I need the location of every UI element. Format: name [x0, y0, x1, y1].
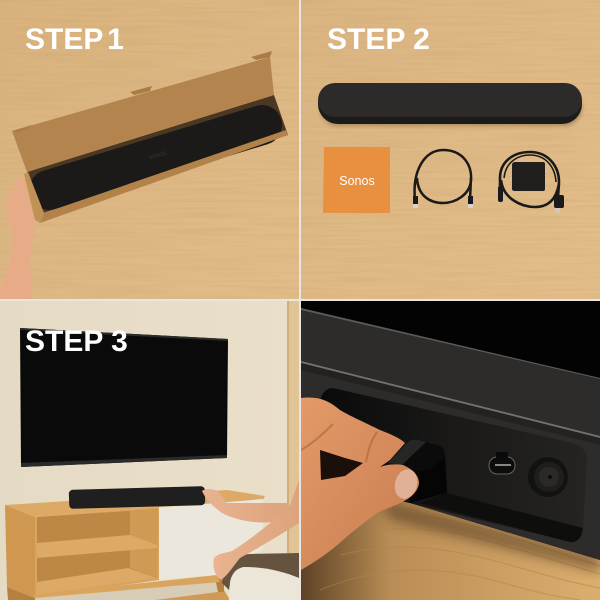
soundbar rear [301, 308, 600, 560]
orange Sonos card: Sonos [339, 174, 375, 188]
soundbar on cabinet [69, 486, 205, 509]
person's arms [202, 480, 299, 580]
armchair [222, 553, 299, 600]
soundbar in box: SONOS [148, 150, 168, 162]
wall-mounted TV [20, 328, 228, 467]
hand inserting plug [301, 398, 421, 570]
heading: step 2: STEP 2 [327, 23, 430, 56]
panel: step 3 placement [0, 301, 300, 600]
heading: step 3: STEP 3 [25, 325, 128, 358]
soundbar front view [318, 83, 582, 126]
panel: step 4 cable connection [301, 301, 600, 600]
cable plug [388, 440, 447, 503]
orange Sonos card [323, 147, 390, 213]
media cabinet [5, 490, 265, 600]
box front wall [24, 130, 288, 223]
hand holding box [0, 177, 35, 300]
audio jack [528, 457, 568, 497]
USB-C port [489, 452, 515, 474]
panel: step 1 unboxing [0, 0, 299, 300]
desk surface [301, 502, 600, 600]
knuckle creases [301, 424, 377, 462]
gap between fingers [320, 450, 363, 480]
cardboard box [12, 51, 288, 213]
power adapter and cord [498, 152, 564, 213]
rear port recess [318, 388, 587, 542]
USB cable [413, 150, 473, 208]
thumb nail [394, 469, 418, 499]
soundbar in box [49, 125, 262, 190]
panel: step 2 contents [301, 0, 600, 299]
heading: step 1: STEP 1 [25, 23, 124, 56]
curtain [287, 301, 300, 553]
